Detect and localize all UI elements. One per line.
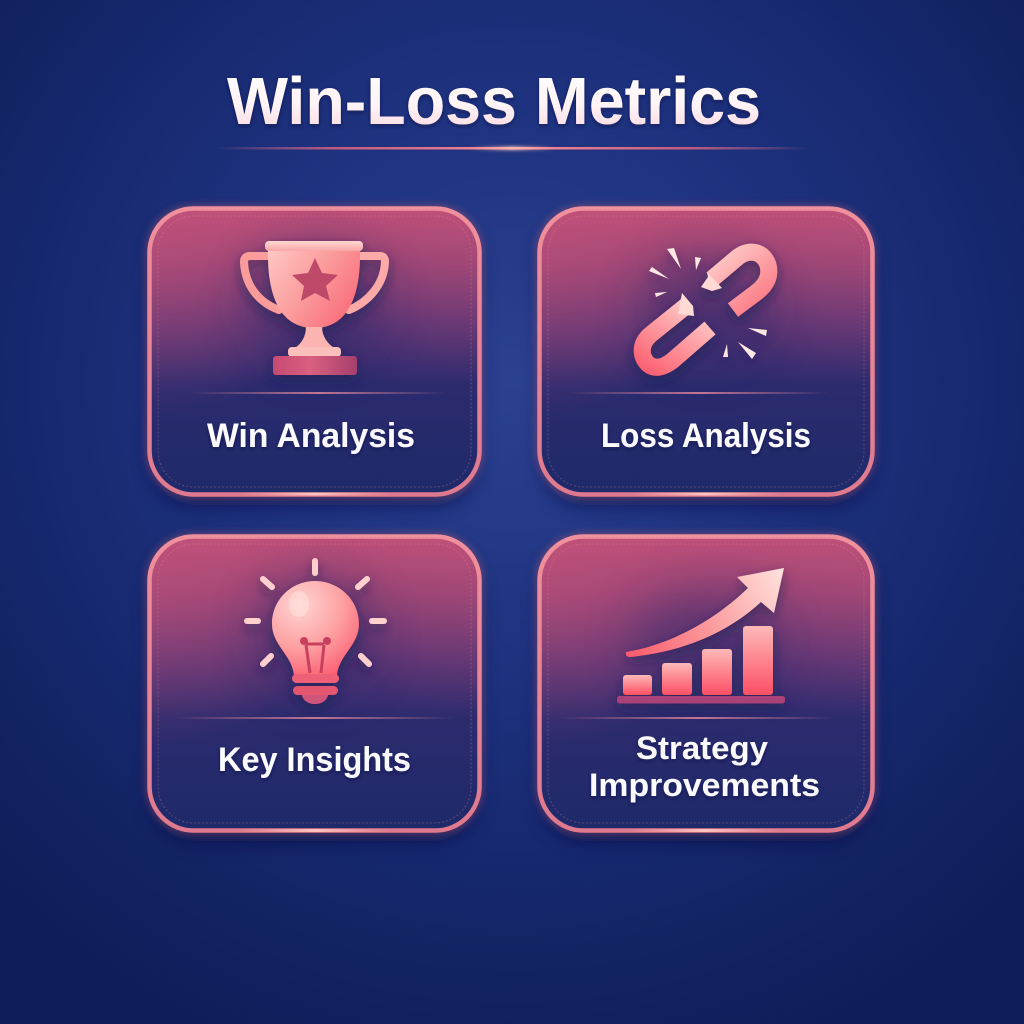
label: Strategy xyxy=(636,730,768,766)
panel: win analysis xyxy=(149,208,480,505)
panel: strategy improvements xyxy=(539,536,873,841)
label xyxy=(589,730,820,803)
divider xyxy=(190,392,447,394)
icon: trophy xyxy=(244,241,385,375)
icon: growth chart xyxy=(617,568,785,704)
label: Improvements xyxy=(589,767,820,803)
divider xyxy=(560,717,835,719)
title underline xyxy=(215,146,810,150)
label: Loss Analysis xyxy=(601,417,811,455)
title: Win-Loss Metrics xyxy=(227,64,761,139)
label: Key Insights xyxy=(218,741,411,779)
icon: light bulb xyxy=(247,561,384,704)
divider xyxy=(175,717,455,719)
panel: loss analysis xyxy=(539,208,873,505)
divider xyxy=(568,392,830,394)
panel: key insights xyxy=(149,536,480,841)
icon: broken chain xyxy=(642,248,769,367)
label: Win Analysis xyxy=(207,417,415,455)
